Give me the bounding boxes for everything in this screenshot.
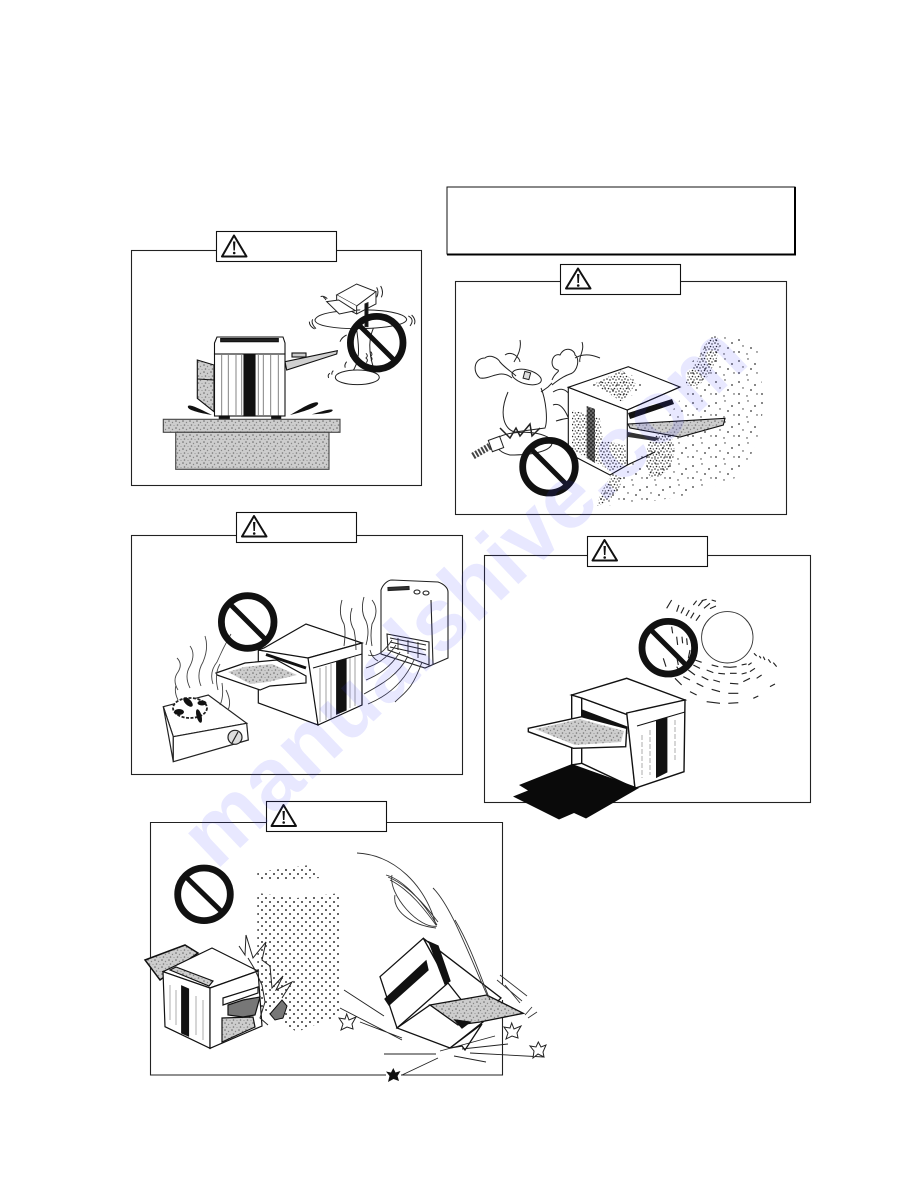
impact marks bbox=[188, 402, 333, 415]
impact burst bbox=[239, 935, 292, 1025]
printer bbox=[528, 678, 685, 788]
panel frame bbox=[132, 250, 422, 486]
panel: heat sources bbox=[132, 512, 462, 774]
prohibition sign bbox=[350, 316, 403, 369]
prohibition sign bbox=[178, 868, 230, 921]
prohibition sign bbox=[642, 621, 695, 674]
printer on table bbox=[163, 337, 340, 469]
prohibition sign bbox=[221, 596, 274, 648]
impact lines bbox=[340, 990, 544, 1075]
panel: unstable surface bbox=[132, 232, 422, 486]
panel frame bbox=[132, 536, 462, 774]
warning box bbox=[447, 187, 795, 254]
motion lines bbox=[357, 853, 537, 1018]
dust cloud bbox=[597, 334, 763, 506]
caution tab bbox=[216, 232, 336, 262]
panel frame bbox=[484, 556, 810, 802]
star: black bbox=[386, 1068, 400, 1082]
panel: steam and dust bbox=[456, 264, 786, 514]
heat waves from heater bbox=[340, 597, 422, 704]
kettle on burner bbox=[473, 340, 600, 456]
stove bbox=[163, 695, 248, 762]
small printer on wobbling pedestal bbox=[309, 284, 415, 385]
panel frame bbox=[150, 822, 502, 1075]
printer under dust bbox=[568, 367, 725, 475]
warning box shadow edge bbox=[447, 187, 795, 254]
sun rays bbox=[663, 599, 777, 703]
heater bbox=[381, 580, 448, 668]
watermark: manualshive.com bbox=[161, 305, 765, 885]
star: right bbox=[504, 1023, 521, 1039]
caution tab bbox=[236, 512, 356, 542]
printer bbox=[216, 624, 362, 725]
broken fragment bbox=[270, 1000, 287, 1020]
caution tab bbox=[560, 264, 680, 294]
prohibition sign bbox=[523, 440, 575, 493]
heat waves from stove bbox=[175, 634, 231, 710]
dotted wall bbox=[257, 865, 341, 1032]
caution tab bbox=[266, 802, 386, 832]
printer hitting wall bbox=[145, 945, 262, 1048]
sun bbox=[702, 612, 753, 663]
panel: bumps and drops bbox=[145, 802, 546, 1082]
panel: direct sunlight bbox=[484, 536, 810, 820]
stove flames bbox=[174, 696, 206, 723]
panel frame bbox=[456, 282, 786, 514]
star: far right bbox=[530, 1042, 546, 1058]
star: left bbox=[339, 1014, 356, 1030]
falling printer bbox=[380, 938, 523, 1050]
caution tab bbox=[588, 536, 708, 566]
printer shadow bbox=[513, 764, 639, 820]
